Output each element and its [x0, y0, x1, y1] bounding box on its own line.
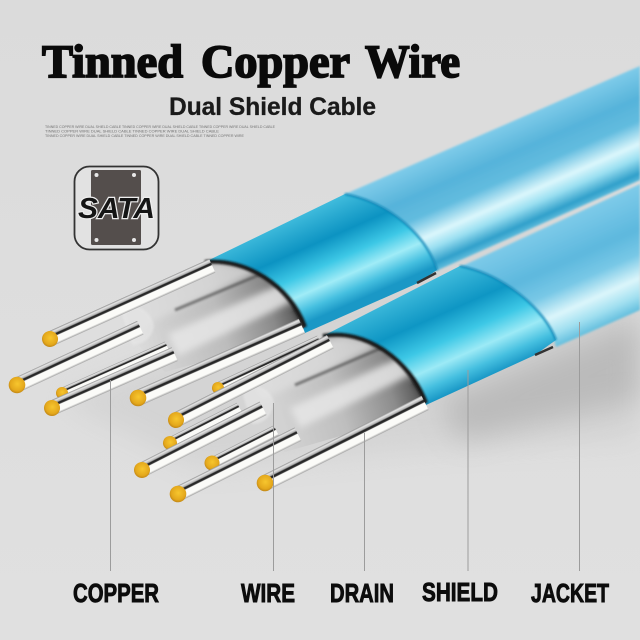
label: drain: DRAIN — [330, 578, 394, 608]
subtitle: Dual Shield Cable — [169, 93, 376, 121]
conductor 2 — [6, 320, 144, 396]
shield seam: upper — [417, 273, 436, 283]
cable: upper — [6, 66, 640, 419]
conductor 6 — [131, 401, 267, 481]
opening rim: lower — [323, 335, 426, 403]
opening rim: upper — [205, 262, 305, 327]
insulated wire ends: lower — [243, 386, 274, 424]
interior: upper — [152, 263, 305, 367]
fine print: TINNED COPPER WIRE DUAL SHIELD CABLE TINNED COPPER WIRE DUAL SHIELD CABLE TINNED COPPER WIRE DUAL SHIELD CABLE — [45, 125, 276, 129]
label: copper: COPPER — [73, 578, 159, 608]
conductor 7 — [167, 427, 302, 505]
fine print: TINNED COPPER WIRE DUAL SHIELD CABLE TINNED COPPER WIRE DUAL SHIELD CABLE TINNED COPPER WIRE — [45, 134, 245, 138]
jacket: lower — [460, 184, 640, 347]
insulated wire ends: upper — [122, 306, 154, 345]
label: wire: WIRE — [241, 578, 295, 608]
rear wire tip A — [210, 335, 322, 396]
shield edge: upper — [345, 194, 437, 270]
cable: lower — [131, 184, 640, 505]
wire behind tip: upper — [54, 341, 169, 401]
conductor 8 — [254, 395, 429, 494]
rear wire tip C — [202, 424, 280, 473]
jacket: upper — [343, 66, 640, 271]
icon: SATA badge — [74, 166, 158, 250]
title — [42, 36, 460, 88]
title: Tinned — [42, 36, 183, 88]
icon: SATA badge: SATA — [78, 193, 155, 225]
rear wire tip B — [161, 401, 243, 452]
interior: lower — [293, 336, 426, 447]
leader lines — [110, 322, 580, 571]
fine print: TINNED COPPER WIRE DUAL SHIELD CABLE TINNED COPPER WIRE DUAL SHIELD CABLE — [45, 130, 220, 134]
label: jacket: JACKET — [531, 578, 609, 608]
label: shield: SHIELD — [422, 577, 498, 607]
shield: upper — [205, 194, 437, 333]
title: Wire — [365, 36, 460, 88]
shield: lower — [323, 266, 556, 405]
title: Copper — [201, 36, 350, 88]
shield edge: lower — [460, 266, 556, 340]
conductor 1 — [39, 258, 216, 350]
conductor 4 — [127, 318, 305, 409]
fine print — [45, 125, 276, 138]
conductor 3 — [41, 347, 178, 419]
shield seam: lower — [535, 347, 553, 355]
conductor 5 — [165, 335, 334, 431]
